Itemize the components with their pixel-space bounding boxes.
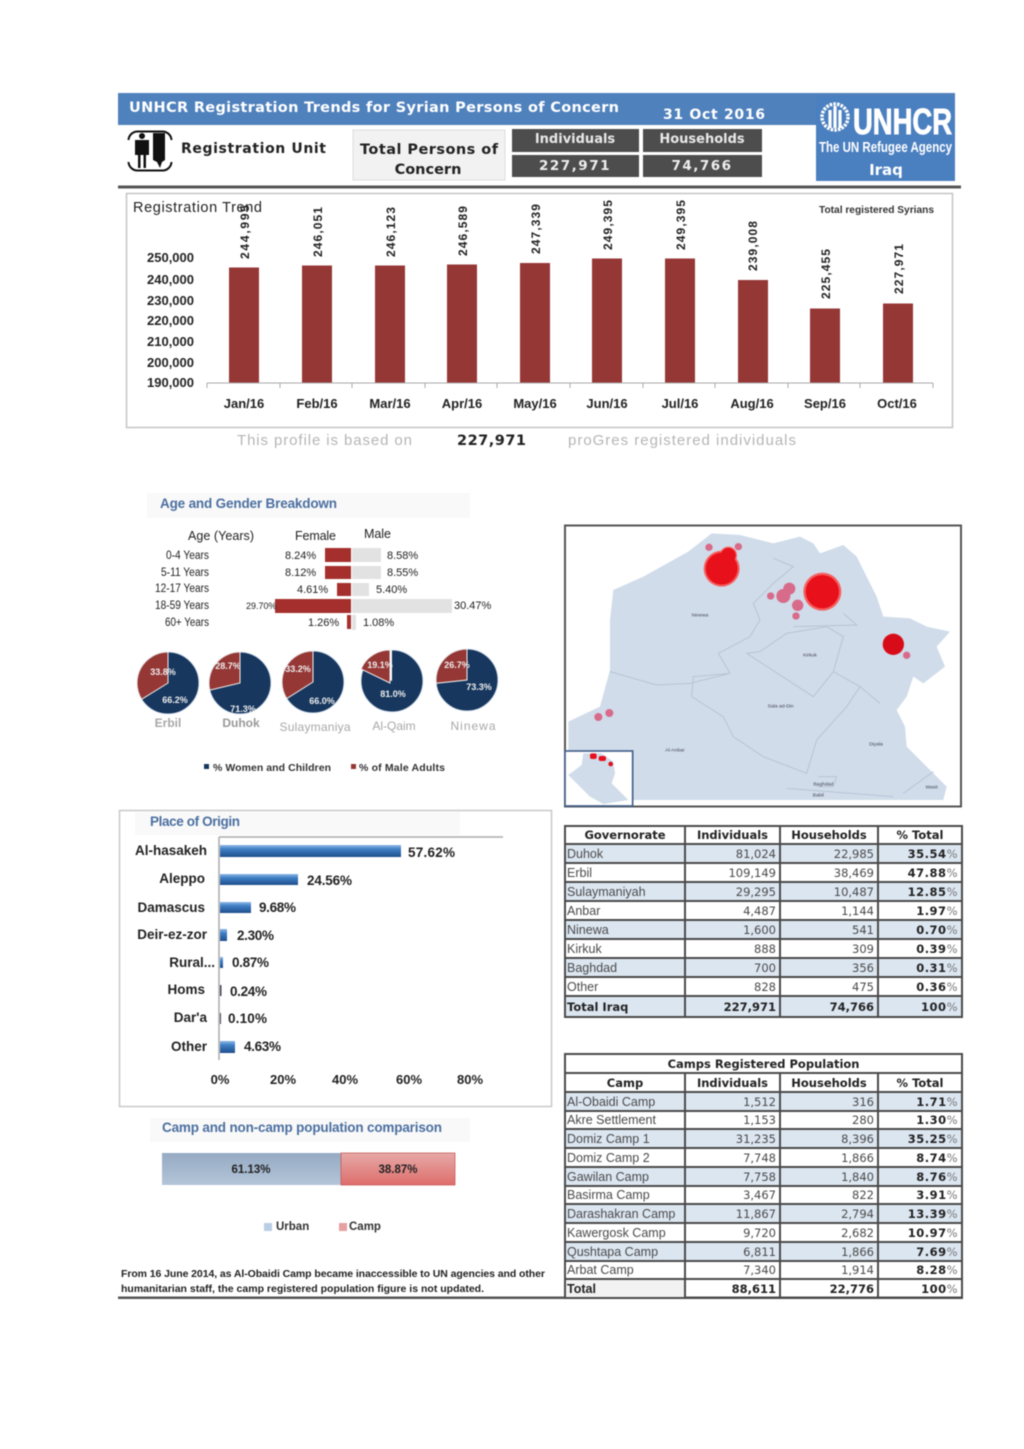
table: camps registered population: 8,396: [841, 1132, 874, 1146]
table: governorates: Governorate: [584, 828, 666, 842]
pie: Duhok: Duhok: [222, 716, 260, 730]
table: governorates: 0.70%: [916, 922, 958, 936]
table: governorates: 35.54%: [908, 846, 958, 860]
households stat: Households: [659, 132, 745, 147]
map: governorates: Babil: [813, 793, 824, 799]
pie: Ninewa: 73.3%: [466, 682, 492, 692]
table: camps registered population: 316: [852, 1094, 874, 1108]
bar value labels: 246,051: [311, 207, 325, 257]
households stat: 74,766: [671, 158, 733, 174]
column headers: Male: [364, 527, 391, 541]
footnote: From 16 June 2014, as Al-Obaidi Camp became inaccessible to UN agencies and other: [121, 1268, 545, 1280]
y axis labels: 240,000: [147, 272, 194, 287]
camp bar: [341, 1153, 455, 1185]
table: camps registered population: Gawilan Camp: [567, 1170, 649, 1184]
table: governorates: 700: [754, 960, 776, 974]
origin values: 9.68%: [259, 900, 296, 915]
pie: Erbil: 66.2%: [162, 695, 188, 705]
table: camps registered population: 22,776: [830, 1282, 874, 1296]
bar value labels: [238, 200, 906, 299]
table: camps registered population: 2,682: [841, 1226, 874, 1240]
table: camps registered population: % Total: [897, 1076, 944, 1090]
table: camps registered population: 10.97%: [908, 1226, 958, 1240]
table: camps registered population: Individuals: [697, 1076, 768, 1090]
x axis labels: 60%: [396, 1072, 422, 1087]
table: governorates: 38,469: [834, 866, 874, 880]
origin labels: Damascus: [137, 900, 205, 915]
table: camps registered population: 280: [852, 1113, 874, 1127]
origin values: 0.10%: [228, 1011, 267, 1026]
age labels: 12-17 Years: [155, 583, 209, 595]
table: camps registered population: Basirma Camp: [567, 1188, 650, 1202]
age labels: 5-11 Years: [161, 567, 209, 579]
title: UNHCR Registration Trends for Syrian Persons of Concern: [129, 100, 619, 116]
panel: age and gender breakdown: [147, 493, 492, 630]
pie: Ninewa: 26.7%: [444, 660, 470, 670]
origin labels: Dar'a: [174, 1010, 207, 1025]
x axis labels: 20%: [270, 1072, 296, 1087]
x axis labels: 80%: [457, 1072, 483, 1087]
bar value labels: 227,971: [892, 244, 906, 294]
month labels: [224, 396, 917, 411]
chart heading: Registration Trend: [133, 200, 262, 216]
pie: Al-Qaim: 81.0%: [380, 689, 406, 699]
UNHCR logo block: UNHCR: [853, 101, 952, 142]
table: governorates: Individuals: [697, 828, 768, 842]
chart subtitle: Total registered Syrians: [819, 205, 934, 216]
pie legend: % Women and Children: [213, 762, 331, 774]
table: governorates: 22,985: [834, 846, 874, 860]
pie: Sulaymaniya: Sulaymaniya: [280, 720, 351, 734]
pyramid values: 8.58%: [387, 550, 418, 562]
individuals stat: 227,971: [539, 158, 611, 174]
origin labels: Rural...: [169, 955, 215, 970]
map: governorates: Baghdad: [813, 782, 834, 788]
heading: Place of Origin: [150, 814, 240, 829]
bar value labels: 246,589: [456, 206, 470, 256]
column headers: Female: [295, 529, 336, 543]
pyramid values: 4.61%: [297, 584, 328, 596]
total persons of concern box: Total Persons of: [360, 142, 499, 158]
table: camps registered population: 100%: [921, 1282, 958, 1296]
table: governorates: 4,487: [743, 904, 776, 918]
table: camps registered population: 9,720: [743, 1226, 776, 1240]
age labels: 60+ Years: [165, 617, 209, 629]
month labels: Oct/16: [877, 396, 917, 411]
y axis labels: [147, 250, 194, 390]
pie: Duhok: 28.7%: [215, 661, 241, 671]
bar value labels: 246,123: [384, 207, 398, 257]
table: governorates: 888: [754, 942, 776, 956]
table: governorates: 0.39%: [916, 942, 958, 956]
table: camps registered population: [563, 1052, 964, 1300]
table: camps registered population: 2,794: [841, 1206, 874, 1220]
total persons of concern box: [353, 130, 505, 180]
table: camps registered population: 7,340: [743, 1263, 776, 1277]
table: camps registered population: Domiz Camp 1: [567, 1132, 650, 1146]
table: camps registered population: 35.25%: [908, 1132, 958, 1146]
urban bar: 61.13%: [231, 1164, 271, 1176]
table: camps registered population: 1,866: [841, 1150, 874, 1164]
table: camps registered population: Kawergosk Camp: [567, 1226, 666, 1240]
pyramid values: 29.70%: [246, 601, 277, 611]
table: camps registered population: 1,840: [841, 1170, 874, 1184]
table: governorates: Baghdad: [567, 960, 617, 974]
y axis labels: 220,000: [147, 313, 194, 328]
pie: Erbil: Erbil: [155, 716, 181, 730]
table: governorates: 475: [852, 980, 874, 994]
age labels: [155, 550, 209, 629]
y axis labels: 230,000: [147, 293, 194, 308]
table: camps registered population: Darashakran Camp: [567, 1206, 675, 1220]
bar chart: monthly registrations: [229, 258, 913, 383]
origin labels: Al-hasakeh: [135, 843, 207, 858]
pie: Sulaymaniya: 66.0%: [309, 696, 335, 706]
pyramid values: [246, 550, 492, 629]
pyramid values: 8.55%: [387, 567, 418, 579]
panel: registration trend: [126, 194, 952, 428]
bar value labels: 249,395: [601, 200, 615, 250]
table: governorates: 227,971: [724, 1000, 776, 1014]
table: governorates: Ninewa: [567, 922, 609, 936]
table: governorates: % Total: [897, 828, 943, 842]
pie: Al-Qaim: 19.1%: [367, 660, 393, 670]
table: camps registered population: 31,235: [736, 1132, 776, 1146]
map inset: [565, 751, 633, 806]
heading: Camp and non-camp population comparison: [162, 1120, 442, 1135]
month labels: Aug/16: [730, 396, 774, 411]
table: governorates: 356: [852, 960, 874, 974]
map: governorates: Diyala: [869, 742, 883, 748]
origin labels: Other: [171, 1039, 208, 1054]
individuals stat: Individuals: [535, 132, 615, 147]
table: camps registered population: 13.39%: [908, 1206, 958, 1220]
table: governorates: Sulaymaniyah: [567, 884, 646, 898]
month labels: May/16: [513, 396, 557, 411]
table: governorates: Households: [791, 828, 867, 842]
table: camps registered population: Arbat Camp: [567, 1263, 634, 1277]
UNHCR logo block: [816, 96, 955, 181]
total persons of concern box: Concern: [395, 162, 461, 178]
map: governorates: Ninewa: [692, 613, 709, 619]
x axis labels: 0%: [211, 1072, 230, 1087]
y axis labels: 210,000: [147, 334, 194, 349]
map: governorates: Al-Anbar: [665, 747, 685, 753]
bar value labels: 247,339: [529, 204, 543, 254]
pyramid values: 30.47%: [454, 600, 492, 612]
table: governorates: 100%: [921, 1000, 958, 1014]
origin values: 24.56%: [307, 873, 352, 888]
legend: Camp: [349, 1221, 381, 1233]
table: governorates: 541: [852, 922, 874, 936]
table: camps registered population: 8.76%: [916, 1170, 958, 1184]
y axis labels: 200,000: [147, 355, 194, 370]
footnote: humanitarian staff, the camp registered population figure is not updated.: [121, 1283, 484, 1295]
table: governorates: 1,144: [841, 904, 874, 918]
table: camps registered population: Camps Registered Population: [668, 1056, 859, 1070]
pyramid values: 1.26%: [308, 617, 339, 629]
table: camps registered population: 1,153: [743, 1113, 776, 1127]
month labels: Jan/16: [224, 396, 264, 411]
panel: camp and non-camp comparison: [150, 1118, 470, 1233]
table: camps registered population: 3,467: [743, 1188, 776, 1202]
table: camps registered population: 822: [852, 1188, 874, 1202]
pie: Al-Qaim: [361, 650, 423, 733]
table: camps registered population: Akre Settlement: [567, 1113, 656, 1127]
map: governorates: Kirkuk: [803, 653, 817, 659]
pie: Ninewa: Ninewa: [450, 719, 496, 733]
profile basis note: 227,971: [457, 433, 526, 449]
month labels: Feb/16: [296, 396, 338, 411]
pyramid values: 8.12%: [285, 567, 316, 579]
table: governorates: 109,149: [728, 866, 776, 880]
origin values: 57.62%: [408, 845, 455, 860]
table: governorates: 0.36%: [916, 980, 958, 994]
month labels: Jun/16: [586, 396, 628, 411]
pie legend: % of Male Adults: [359, 762, 445, 774]
icon: UNHCR emblem: [822, 104, 848, 130]
age labels: 18-59 Years: [155, 600, 209, 612]
origin labels: [135, 843, 215, 1054]
icon: registration unit: [122, 132, 174, 170]
table: camps registered population: 1,512: [743, 1094, 776, 1108]
table: governorates: 828: [754, 980, 776, 994]
table: camps registered population: 1,866: [841, 1244, 874, 1258]
origin values: 4.63%: [244, 1039, 281, 1054]
column headers: Age (Years): [188, 529, 254, 543]
bar chart: origin: [220, 845, 401, 1053]
table: camps registered population: 88,611: [732, 1282, 776, 1296]
map: governorates: Sala ad-Din: [768, 703, 794, 709]
pie legend: [204, 762, 445, 774]
header banner: [118, 93, 955, 125]
table: camps registered population: 8.28%: [916, 1263, 958, 1277]
origin values: [228, 845, 455, 1054]
month labels: Jul/16: [662, 396, 698, 411]
y axis labels: 250,000: [147, 250, 194, 265]
unit label: Registration Unit: [181, 141, 326, 157]
bar value labels: 249,395: [674, 200, 688, 250]
table: governorates: Other: [567, 980, 598, 994]
table: camps registered population: 7.69%: [916, 1244, 958, 1258]
month labels: Sep/16: [804, 396, 846, 411]
table: camps registered population: 11,867: [736, 1206, 776, 1220]
panel: map of Iraq: [565, 526, 961, 806]
table: governorates: Anbar: [567, 904, 600, 918]
pie: Duhok: [209, 652, 271, 730]
table: camps registered population: 7,748: [743, 1150, 776, 1164]
pie: Sulaymaniya: 33.2%: [285, 664, 311, 674]
profile basis note: proGres registered individuals: [568, 432, 796, 449]
pyramid values: 1.08%: [363, 617, 394, 629]
x axis labels: [211, 1072, 483, 1087]
table: camps registered population: 1.30%: [916, 1113, 958, 1127]
population pyramid: male bars: [352, 548, 452, 630]
panel: place of origin: [120, 810, 552, 1106]
table: governorates: Duhok: [567, 846, 603, 860]
urban bar: [162, 1153, 341, 1185]
table: camps registered population: 3.91%: [916, 1188, 958, 1202]
table: governorates: 1,600: [743, 922, 776, 936]
map: governorates: Wasit: [926, 785, 938, 791]
origin values: 2.30%: [237, 928, 274, 943]
table: governorates: 10,487: [834, 884, 874, 898]
table: governorates: 81,024: [736, 846, 776, 860]
map: governorates: [565, 533, 950, 806]
pie: Duhok: 71.3%: [230, 704, 256, 714]
camp bar: 38.87%: [378, 1164, 418, 1176]
table: governorates: 47.88%: [908, 866, 958, 880]
x axis labels: 40%: [332, 1072, 358, 1087]
individuals stat: [512, 129, 639, 177]
report date: 31 Oct 2016: [663, 107, 765, 123]
population pyramid: female bars: [275, 548, 351, 629]
table: camps registered population: 1.71%: [916, 1094, 958, 1108]
heading: Age and Gender Breakdown: [160, 496, 337, 511]
pie: Erbil: 33.8%: [150, 667, 176, 677]
legend: Urban: [276, 1221, 309, 1233]
table: governorates: 12.85%: [908, 884, 958, 898]
table: camps registered population: 8.74%: [916, 1150, 958, 1164]
pie: Ninewa: [436, 649, 498, 733]
UNHCR logo block: The UN Refugee Agency: [819, 139, 952, 156]
households stat: [643, 129, 762, 177]
table: camps registered population: Domiz Camp 2: [567, 1150, 650, 1164]
table: governorates: 74,766: [830, 1000, 874, 1014]
UNHCR logo block: Iraq: [869, 161, 903, 179]
origin labels: Aleppo: [159, 871, 205, 886]
table: governorates: 0.31%: [916, 960, 958, 974]
table: camps registered population: 6,811: [743, 1244, 776, 1258]
table: camps registered population: Al-Obaidi Camp: [567, 1094, 655, 1108]
table: governorates: 1.97%: [916, 904, 958, 918]
bar value labels: 244,995: [238, 205, 252, 259]
pyramid values: 8.24%: [285, 550, 316, 562]
bar value labels: 239,008: [746, 221, 760, 271]
origin values: 0.24%: [230, 984, 267, 999]
table: governorates: Erbil: [567, 866, 592, 880]
column headers: [188, 527, 391, 543]
pyramid values: 5.40%: [376, 584, 407, 596]
month labels: Mar/16: [369, 396, 411, 411]
table: camps registered population: Camp: [607, 1076, 643, 1090]
table: governorates: Total Iraq: [567, 1000, 628, 1014]
origin labels: Homs: [167, 982, 205, 997]
bar value labels: 225,455: [819, 249, 833, 299]
footnote: [121, 1268, 545, 1295]
table: camps registered population: Households: [791, 1076, 867, 1090]
y axis labels: 190,000: [147, 375, 194, 390]
table: governorates: 309: [852, 942, 874, 956]
pie: Al-Qaim: Al-Qaim: [372, 719, 416, 733]
table: camps registered population: Qushtapa Camp: [567, 1244, 658, 1258]
x axis: [207, 383, 933, 388]
table: governorates: Kirkuk: [567, 942, 602, 956]
table: governorates: [563, 824, 964, 1019]
month labels: Apr/16: [442, 396, 482, 411]
profile basis note: This profile is based on: [237, 432, 412, 449]
pie: Erbil: [137, 652, 199, 730]
pie: Sulaymaniya: [280, 651, 351, 734]
legend: [264, 1221, 381, 1233]
age labels: 0-4 Years: [166, 550, 209, 562]
origin labels: Deir-ez-zor: [137, 927, 208, 942]
profile basis note: [237, 432, 796, 449]
table: camps registered population: Total: [567, 1282, 596, 1296]
table: camps registered population: 7,758: [743, 1170, 776, 1184]
table: governorates: 29,295: [736, 884, 776, 898]
table: camps registered population: 1,914: [841, 1263, 874, 1277]
origin values: 0.87%: [232, 955, 269, 970]
